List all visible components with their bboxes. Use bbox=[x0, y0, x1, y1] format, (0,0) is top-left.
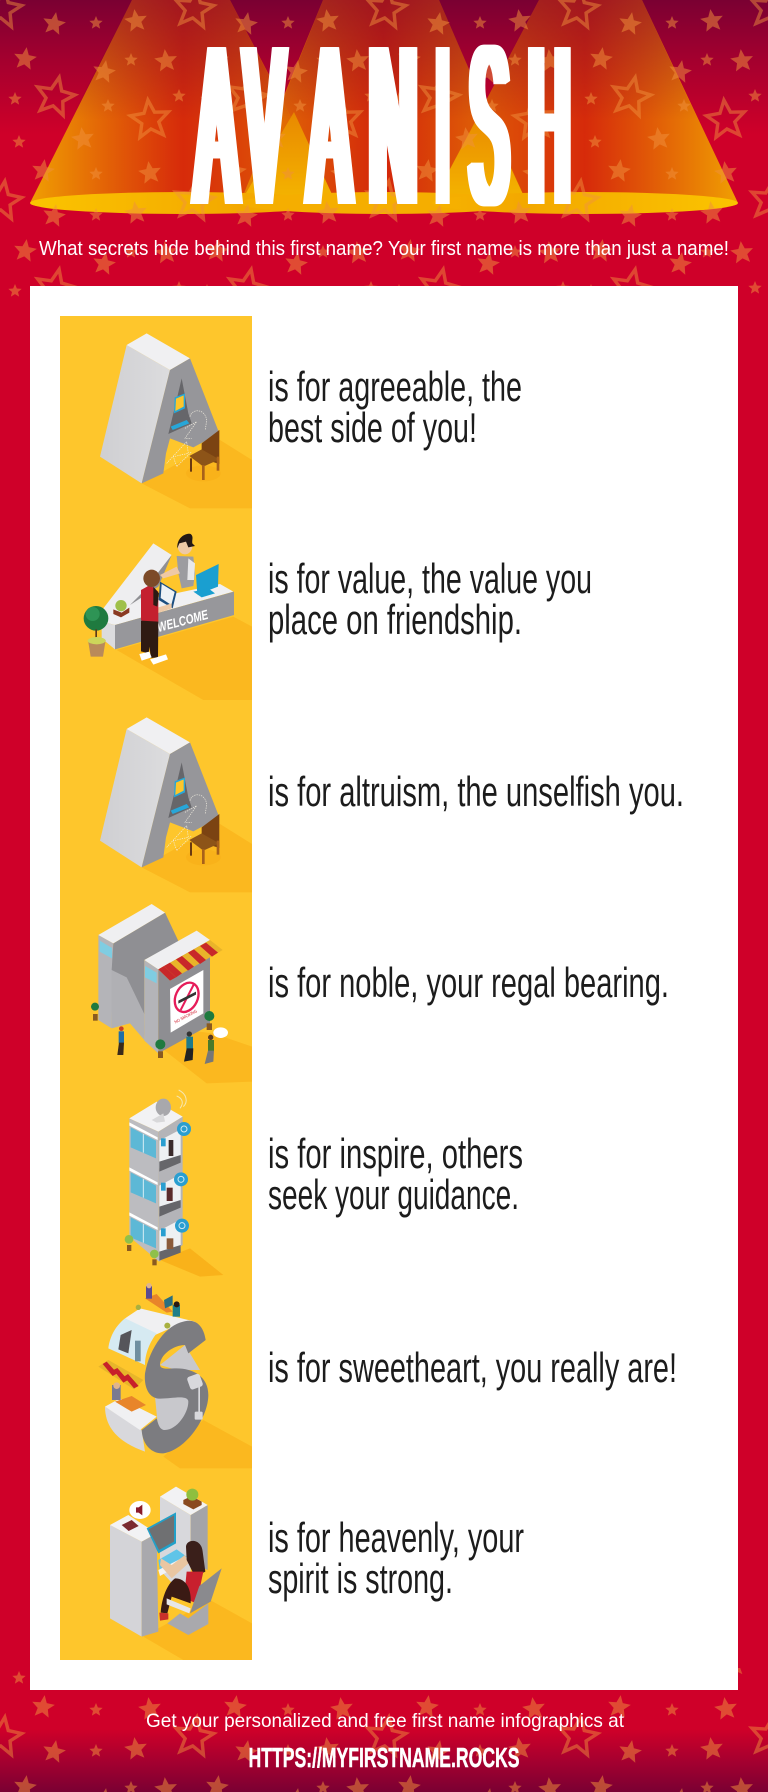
title: H bbox=[529, 0, 570, 253]
awning bbox=[158, 940, 223, 981]
text: row 1: is for agreeable, the bbox=[268, 363, 522, 410]
icon: letter A with desk (repeat) bbox=[100, 717, 252, 892]
icon: letter A with desk bbox=[100, 333, 252, 508]
icon: letter N shop building: NO SMOKING bbox=[173, 1008, 198, 1025]
title: V bbox=[245, 0, 284, 253]
icon: letter V welcome desk bbox=[84, 534, 252, 700]
welcome sign text: WELCOME bbox=[156, 607, 210, 635]
title: I bbox=[436, 0, 449, 253]
text: row 7: spirit is strong. bbox=[268, 1555, 453, 1602]
icon: letter H desk bbox=[110, 1487, 252, 1660]
footer call to action: Get your personalized and free first name infographics at bbox=[146, 1710, 625, 1732]
text: row 2 bbox=[268, 555, 592, 643]
text: row 1 bbox=[268, 363, 522, 451]
text: row 2: place on friendship. bbox=[268, 596, 522, 643]
title: A bbox=[196, 0, 237, 253]
star pattern bottom bbox=[0, 1668, 768, 1792]
title: N bbox=[370, 0, 416, 253]
text: row 5 bbox=[268, 1130, 523, 1218]
icon: letter S office bbox=[98, 1283, 252, 1468]
text: row 5: seek your guidance. bbox=[268, 1171, 519, 1218]
icon: letter I tower bbox=[125, 1090, 223, 1277]
text: row 7: is for heavenly, your bbox=[268, 1514, 524, 1561]
footer url: HTTPS://MYFIRSTNAME.ROCKS bbox=[248, 1742, 520, 1773]
title: S bbox=[470, 0, 508, 253]
icon: letter N shop building bbox=[91, 904, 252, 1083]
text: row 7 bbox=[268, 1514, 524, 1602]
text: row 5: is for inspire, others bbox=[268, 1130, 523, 1177]
subtitle: What secrets hide behind this first name? Your first name is more than just a name! bbox=[39, 238, 729, 260]
panel: yellow illustration column bbox=[60, 316, 252, 1660]
title bbox=[190, 0, 571, 253]
text: row 2: is for value, the value you bbox=[268, 555, 592, 602]
title: A bbox=[309, 0, 350, 253]
star pattern top bbox=[0, 0, 768, 300]
text: row 1: best side of you! bbox=[268, 404, 477, 451]
spotlight beams bbox=[30, 0, 738, 214]
panel: white content card bbox=[30, 286, 738, 1690]
